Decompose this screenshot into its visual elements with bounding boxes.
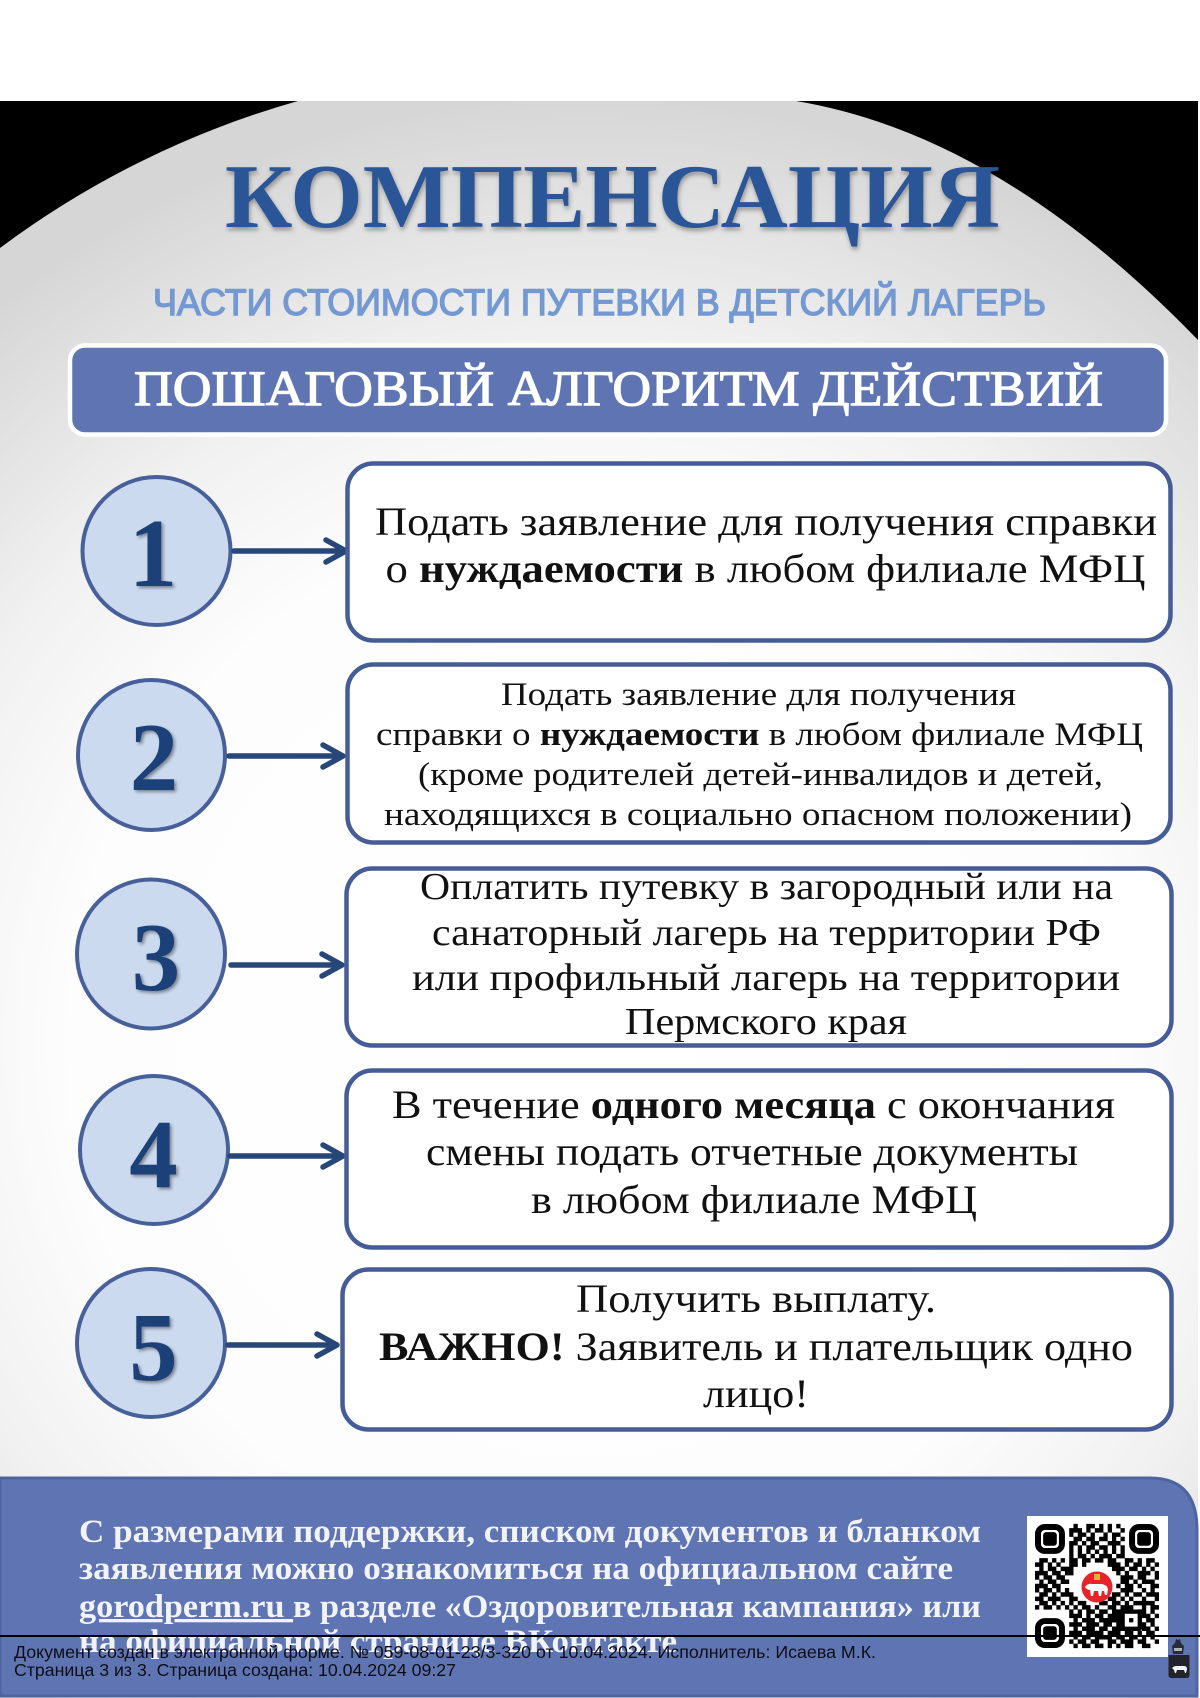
step 3 text box: Оплатить путевку в загородный или на	[420, 866, 1113, 908]
step 2 text box: справки о нуждаемости в любом филиале МФЦ	[376, 717, 1143, 753]
QR code	[1027, 1516, 1168, 1657]
step 4 arrow	[230, 1145, 343, 1167]
banner: step-by-step algorithm	[70, 346, 1166, 434]
step 5 number circle	[77, 1269, 225, 1417]
step 2 number circle	[78, 680, 225, 830]
step 3 number circle: 3	[132, 904, 180, 1011]
document stamp text: Страница 3 из 3. Страница создана: 10.04.2024 09:27	[14, 1660, 456, 1680]
icon: Perm coat of arms	[1168, 1639, 1190, 1678]
document stamp divider line	[0, 1635, 1200, 1637]
footer text: С размерами поддержки, списком документов и бланком	[79, 1514, 981, 1550]
footer panel	[0, 1478, 1200, 1696]
banner: step-by-step algorithm: ПОШАГОВЫЙ АЛГОРИТМ ДЕЙСТВИЙ	[134, 360, 1103, 416]
step 1 arrow	[234, 540, 346, 562]
document stamp text	[14, 1642, 876, 1680]
step 4 number circle	[80, 1076, 228, 1224]
step 4 text box: в любом филиале МФЦ	[531, 1177, 977, 1222]
step 5 text box: лицо!	[703, 1371, 809, 1416]
step 1 number circle: 1	[129, 500, 177, 607]
step 2 text box	[348, 664, 1170, 842]
step 1 number circle	[82, 477, 230, 625]
step 1 text box: Подать заявление для получения справки	[375, 499, 1157, 544]
step 3 text box	[346, 866, 1172, 1046]
step 3	[77, 866, 1172, 1046]
title: КОМПЕНСАЦИЯ	[225, 146, 1000, 247]
step 4 text box: В течение одного месяца с окончания	[392, 1082, 1115, 1127]
step 4 text box	[346, 1070, 1172, 1248]
step 5 arrow	[228, 1334, 337, 1356]
step 5 text box: Получить выплату.	[576, 1276, 936, 1321]
step 1 text box: о нуждаемости в любом филиале МФЦ	[386, 546, 1146, 591]
step 3 text box: Пермского края	[625, 1001, 907, 1043]
step 5 text box: ВАЖНО! Заявитель и плательщик одно	[379, 1324, 1133, 1369]
step 2 arrow	[229, 745, 343, 767]
step 3 number circle	[77, 880, 225, 1028]
step 2 number circle: 2	[130, 704, 178, 811]
step 4 text box: смены подать отчетные документы	[426, 1129, 1078, 1174]
step 1	[82, 464, 1170, 640]
step 3 text box: или профильный лагерь на территории	[412, 957, 1120, 999]
step 3 arrow	[231, 954, 342, 976]
step 5 text box	[342, 1270, 1172, 1430]
step 2 text box: находящихся в социально опасном положении)	[384, 797, 1132, 833]
step 4	[80, 1070, 1172, 1248]
step 1 text box	[348, 464, 1170, 640]
step 2 text box: Подать заявление для получения	[501, 677, 1016, 713]
step 5	[77, 1269, 1172, 1430]
QR logo: red circle with bear	[1082, 1572, 1112, 1602]
footer text: на официальной странице ВКонтакте	[79, 1624, 677, 1660]
document stamp text: Документ создан в электронной форме. № 059-08-01-23/3-320 от 10.04.2024. Исполнитель: Исаева М.К.	[14, 1642, 876, 1662]
step 4 number circle: 4	[129, 1101, 178, 1208]
step 5 number circle: 5	[129, 1294, 178, 1401]
step 2	[78, 664, 1170, 842]
footer text: gorodperm.ru в разделе «Оздоровительная кампания» или	[79, 1589, 981, 1625]
step 3 text box: санаторный лагерь на территории РФ	[432, 912, 1101, 954]
footer text: заявления можно ознакомиться на официальном сайте	[79, 1551, 953, 1587]
subtitle: ЧАСТИ СТОИМОСТИ ПУТЕВКИ В ДЕТСКИЙ ЛАГЕРЬ	[153, 281, 1046, 323]
step 2 text box: (кроме родителей детей-инвалидов и детей,	[418, 757, 1103, 793]
footer text	[79, 1514, 981, 1660]
